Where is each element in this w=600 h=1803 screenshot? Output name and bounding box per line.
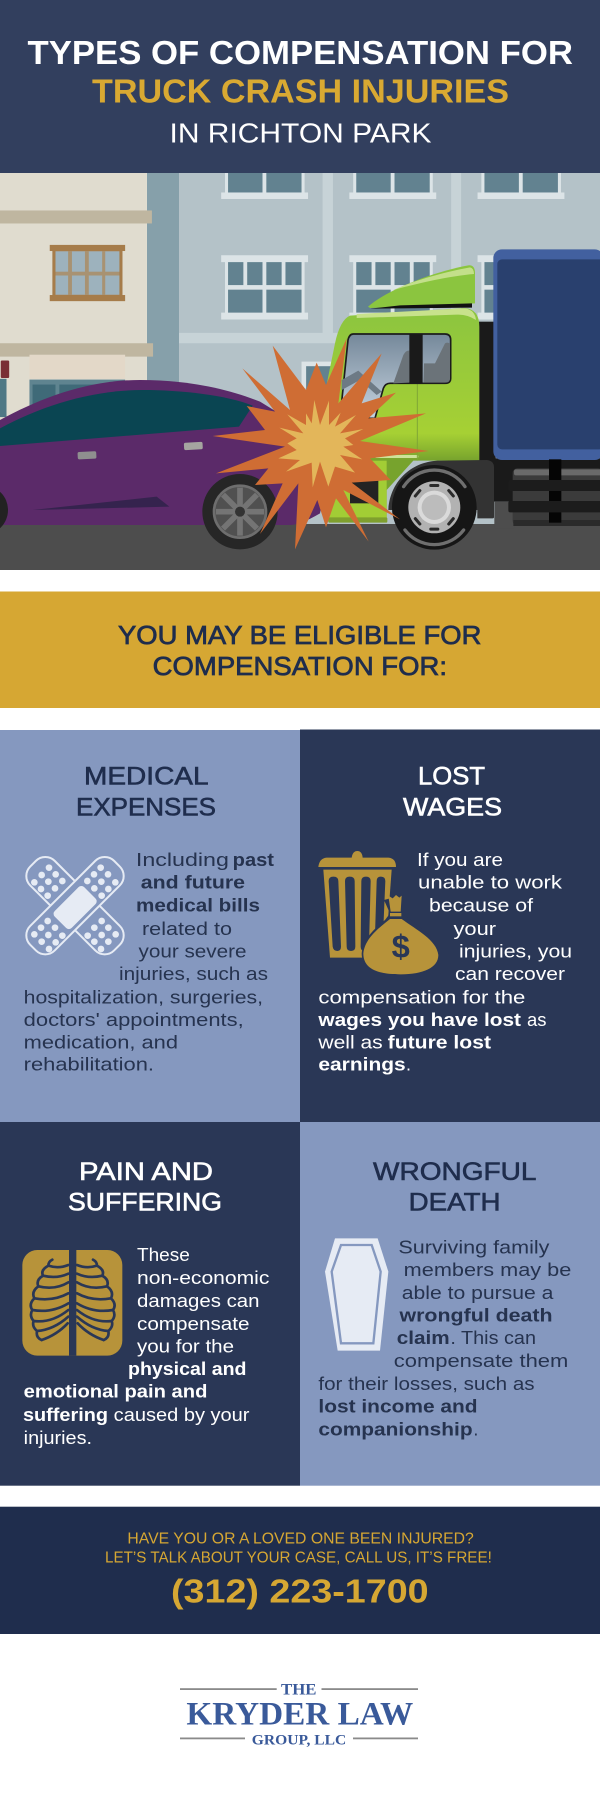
body text: medical expenses: rehabilitation.	[24, 1055, 154, 1075]
icon: trash can with money bag: $	[392, 928, 410, 965]
banner text: COMPENSATION FOR:	[153, 651, 447, 681]
heading: wrongful death	[373, 1158, 537, 1217]
heading: wrongful death: DEATH	[409, 1189, 500, 1217]
body text: wrongful death: able to pursue a	[402, 1283, 555, 1303]
body text: lost wages	[317, 850, 572, 1075]
body text: wrongful death: wrongful death	[398, 1306, 553, 1326]
buildings background	[0, 173, 600, 524]
subtitle: IN RICHTON PARK	[170, 117, 432, 148]
call to action panel	[0, 1507, 600, 1634]
body text: medical expenses: your severe	[138, 941, 246, 961]
body text: medical expenses: past	[233, 850, 274, 870]
icon: trash can with money bag	[318, 851, 439, 976]
body text: wrongful death: companionship	[318, 1419, 473, 1439]
body text: wrongful death: for their losses, such as	[318, 1374, 535, 1394]
body text: wrongful death	[318, 1237, 571, 1439]
illustration: truck and car crash scene	[0, 173, 600, 571]
header panel	[0, 0, 600, 173]
icon: rib cage	[22, 1250, 122, 1356]
phone number: (312) 223-1700	[171, 1573, 429, 1610]
truck	[327, 249, 600, 550]
body text: wrongful death: Surviving family	[398, 1237, 550, 1257]
body text: pain and suffering: caused by your	[114, 1405, 250, 1425]
logo: The Kryder Law Group: GROUP, LLC	[252, 1733, 346, 1749]
body text: medical expenses: related to	[142, 919, 232, 939]
title line 2: TRUCK CRASH INJURIES	[92, 72, 509, 110]
body text: lost wages: .	[406, 1055, 411, 1075]
body text: lost wages: earnings	[318, 1055, 406, 1075]
eligibility banner	[0, 592, 600, 708]
banner text: YOU MAY BE ELIGIBLE FOR	[118, 620, 481, 650]
explosion burst	[213, 338, 429, 549]
body text: pain and suffering: physical and	[128, 1359, 246, 1379]
heading: lost wages	[403, 762, 502, 822]
body text: lost wages: If you are	[417, 850, 503, 870]
title line 1: TYPES OF COMPENSATION FOR	[28, 34, 573, 71]
body text: wrongful death: members may be	[404, 1260, 571, 1280]
body text: pain and suffering: suffering	[23, 1405, 108, 1425]
panel: medical expenses	[0, 730, 300, 1122]
heading: pain and suffering	[68, 1158, 222, 1217]
body text: wrongful death: compensate them	[394, 1351, 568, 1371]
body text: pain and suffering	[23, 1245, 269, 1448]
truck cab	[327, 308, 494, 523]
body text: medical expenses: injuries, such as	[119, 964, 268, 984]
body text: lost wages: because of	[429, 896, 534, 916]
body text: pain and suffering: These	[137, 1245, 190, 1265]
body text: medical expenses	[24, 850, 274, 1075]
body text: lost wages: future lost	[388, 1032, 491, 1052]
body text: pain and suffering: compensate	[137, 1314, 250, 1334]
heading: medical expenses: MEDICAL	[84, 762, 209, 790]
body text: lost wages: well as	[317, 1032, 383, 1052]
body text: lost wages: injuries, you	[459, 941, 572, 961]
logo: The Kryder Law Group: KRYDER LAW	[186, 1696, 413, 1732]
panel: pain and suffering	[0, 1122, 300, 1486]
body text: wrongful death: . This can	[450, 1328, 536, 1348]
truck spoiler	[357, 265, 476, 320]
body text: medical expenses: and future	[141, 872, 245, 892]
body text: wrongful death: claim	[397, 1328, 450, 1348]
body text: lost wages: can recover	[455, 964, 565, 984]
body text: pain and suffering: non-economic	[137, 1268, 269, 1288]
body text: pain and suffering: damages can	[137, 1291, 260, 1311]
banner text	[118, 620, 481, 681]
truck front wheel	[392, 465, 477, 550]
body text: medical expenses: doctors' appointments,	[24, 1010, 244, 1030]
body text: medical expenses: Including	[136, 850, 229, 870]
heading: medical expenses	[76, 762, 216, 822]
panel: wrongful death	[300, 1122, 600, 1486]
call to action text	[105, 1530, 492, 1566]
heading: wrongful death: WRONGFUL	[373, 1158, 537, 1186]
body text: lost wages: wages you have lost	[317, 1010, 521, 1030]
body text: medical expenses: medication, and	[24, 1032, 178, 1052]
body text: pain and suffering: you for the	[137, 1336, 234, 1356]
panel: lost wages	[300, 730, 600, 1122]
car	[0, 380, 333, 549]
body text: lost wages: your	[454, 919, 496, 939]
body text: lost wages: as	[527, 1010, 546, 1030]
icon: crossed bandages	[21, 851, 129, 960]
logo: The Kryder Law Group	[180, 1682, 418, 1749]
icon: coffin	[325, 1238, 388, 1351]
body text: lost wages: compensation for the	[318, 987, 525, 1007]
heading: medical expenses: EXPENSES	[76, 794, 216, 822]
body text: wrongful death: .	[473, 1419, 478, 1439]
heading: pain and suffering: PAIN AND	[79, 1158, 213, 1186]
call to action text: LET’S TALK ABOUT YOUR CASE, CALL US, IT’S FREE!	[105, 1549, 492, 1566]
logo: The Kryder Law Group: THE	[281, 1682, 316, 1699]
heading: lost wages: LOST	[418, 762, 485, 790]
body text: pain and suffering: emotional pain and	[24, 1382, 207, 1402]
truck chassis and cargo box	[479, 249, 600, 528]
body text: medical expenses: medical bills	[136, 896, 260, 916]
call to action text: HAVE YOU OR A LOVED ONE BEEN INJURED?	[127, 1530, 474, 1547]
heading: lost wages: WAGES	[403, 794, 502, 822]
road	[0, 524, 600, 570]
body text: lost wages: unable to work	[418, 872, 563, 892]
body text: wrongful death: lost income and	[318, 1397, 478, 1417]
body text: medical expenses: hospitalization, surgeries,	[24, 987, 263, 1007]
body text: pain and suffering: injuries.	[24, 1428, 92, 1448]
heading: pain and suffering: SUFFERING	[68, 1189, 222, 1217]
